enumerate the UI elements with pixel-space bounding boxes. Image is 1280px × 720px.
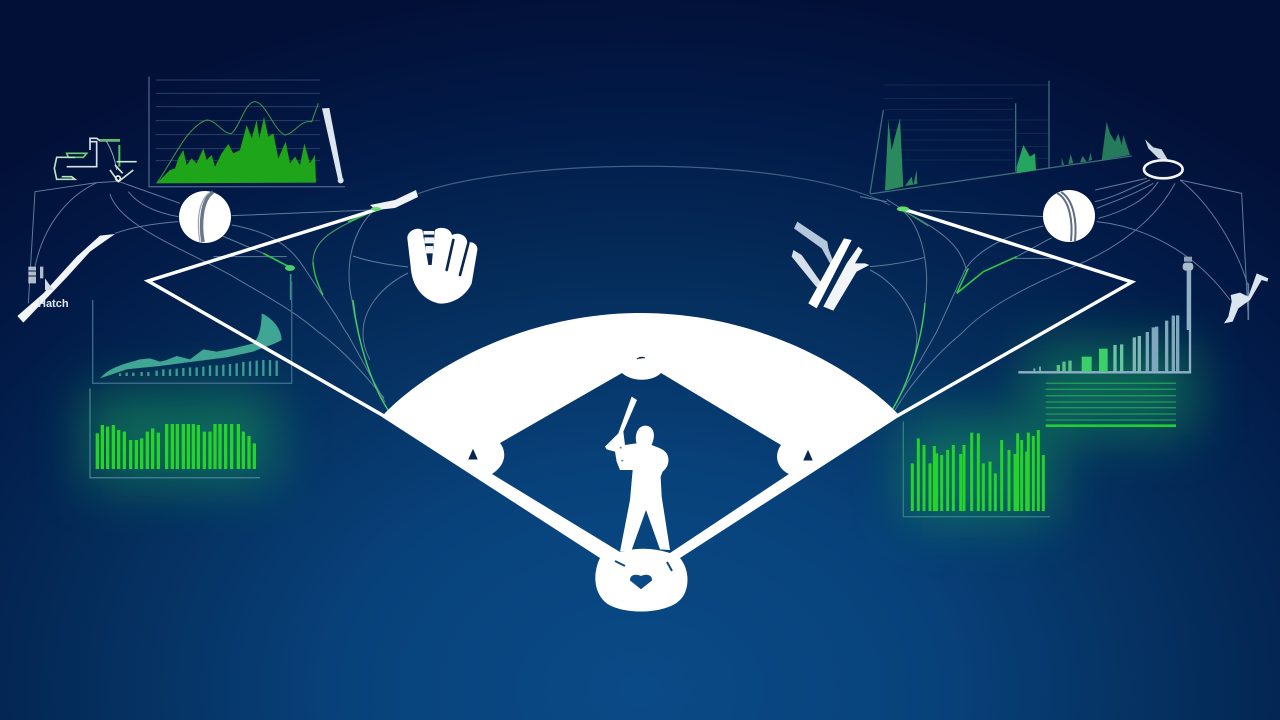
label: small hatch text: Hatch — [38, 298, 69, 310]
icon: signal post — [1183, 257, 1193, 330]
bars — [912, 430, 1043, 511]
small bars — [120, 360, 277, 376]
icon: small bat at left foul line — [370, 190, 418, 210]
axes — [903, 422, 1050, 517]
chart: left green bars — [90, 388, 260, 478]
icon: left white bat — [17, 234, 115, 323]
network curves: right — [860, 178, 1248, 333]
axes — [90, 388, 260, 478]
glow: right green charts — [905, 345, 1195, 520]
infield dirt shape — [382, 313, 900, 612]
green node center-left — [285, 265, 295, 271]
green trend line — [157, 102, 318, 183]
green node right — [897, 206, 909, 212]
icon: glove — [407, 228, 477, 304]
network curves: left — [28, 181, 370, 333]
green node left — [371, 207, 381, 211]
icon: small bat — [322, 108, 344, 183]
chart: left middle teal area — [93, 282, 292, 383]
chart: right green bars — [903, 422, 1050, 517]
glow: left green chart — [85, 390, 275, 485]
icon: right ball — [1043, 190, 1095, 242]
axes — [870, 81, 1132, 194]
icon: top-left line-art machine — [54, 138, 137, 182]
icon: left ball — [179, 191, 231, 243]
green area series — [157, 117, 316, 183]
icon: ring with diving figure — [1144, 139, 1183, 178]
chart: top-right faint area — [870, 81, 1132, 194]
bars — [97, 424, 254, 469]
stripes — [1046, 383, 1176, 420]
axes — [93, 282, 292, 383]
chart: right bar series — [1018, 270, 1190, 426]
grid — [883, 85, 1049, 160]
network curves: right convergence to the infield — [892, 303, 962, 410]
foul lines and outfield wedge — [148, 208, 1132, 416]
green spikes — [885, 118, 1130, 191]
icon: fielder figure right — [1224, 273, 1268, 323]
network curves: top arc — [415, 166, 890, 205]
chart axes and grid — [149, 77, 345, 187]
chart: left top green area — [149, 77, 345, 187]
network curves: left convergence to the infield — [313, 208, 408, 410]
axes — [1018, 270, 1190, 372]
teal area — [100, 313, 282, 378]
base marks — [469, 357, 812, 460]
home plate marks — [615, 561, 672, 588]
batter silhouette — [605, 397, 670, 552]
bars — [1034, 315, 1178, 372]
icon: crossed bats and gear — [792, 222, 869, 311]
